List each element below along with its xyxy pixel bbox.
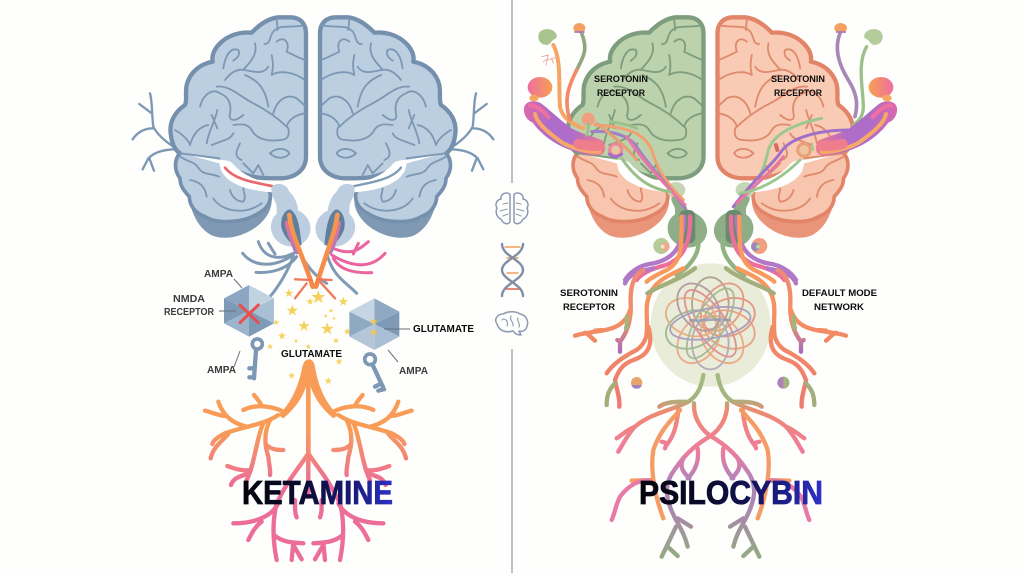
brain: ketamine hemispheres: [133, 17, 493, 238]
neural branches: psilocybin: [575, 268, 846, 557]
labels: ketamine receptors: AMPA: [207, 365, 236, 376]
brainstem and nerve fibers: [243, 184, 385, 298]
panel: ketamine: [133, 17, 493, 560]
receptor: NMDA hexagon with red cross and key: [224, 285, 274, 378]
title: psilocybin: PSILOCYBIN: [639, 474, 823, 511]
labels: psilocybin: [560, 74, 878, 313]
labels: psilocybin: SEROTONIN: [594, 74, 648, 85]
labels: psilocybin: RECEPTOR: [563, 302, 615, 313]
labels: ketamine receptors: NMDA: [173, 294, 205, 305]
small spheres beside the midbrain: [653, 238, 767, 254]
dendrite tree: ketamine: [205, 359, 412, 560]
labels: ketamine receptors: AMPA: [204, 269, 233, 280]
receptor: glutamate hexagon with key: [349, 298, 399, 391]
tangle of rings: [661, 275, 760, 371]
labels: ketamine receptors: RECEPTOR: [164, 307, 214, 318]
labels: ketamine receptors: GLUTAMATE: [281, 349, 342, 360]
brain: psilocybin left hemisphere: [568, 17, 703, 238]
default mode network circle: [651, 263, 771, 387]
labels: ketamine receptors: AMPA: [399, 366, 428, 377]
labels: psilocybin: DEFAULT MODE: [802, 288, 878, 299]
mushrooms and fibers: left: [524, 23, 685, 208]
labels: ketamine receptors: [164, 269, 474, 377]
icon: DNA helix: [502, 244, 523, 296]
panel: psilocybin: [524, 17, 897, 557]
labels: psilocybin: SEROTONIN: [560, 288, 618, 299]
divider with icons: [496, 0, 528, 573]
icon: brain top view: [496, 193, 528, 224]
left hemisphere: [133, 17, 306, 238]
icon: brain side view: [496, 312, 528, 335]
title: ketamine: KETAMINE: [242, 474, 393, 511]
labels: psilocybin: SEROTONIN: [771, 74, 825, 85]
labels: psilocybin: RECEPTOR: [774, 88, 822, 99]
mushrooms and fibers: right: [733, 23, 897, 207]
labels: psilocybin: NETWORK: [814, 302, 864, 313]
brain: psilocybin right hemisphere: [718, 17, 853, 238]
stars: glutamate: [267, 289, 351, 384]
labels: ketamine receptors: GLUTAMATE: [413, 324, 474, 335]
labels: psilocybin: RECEPTOR: [597, 88, 645, 99]
midbrain blobs and columns: [625, 182, 796, 282]
right hemisphere: [320, 17, 493, 238]
